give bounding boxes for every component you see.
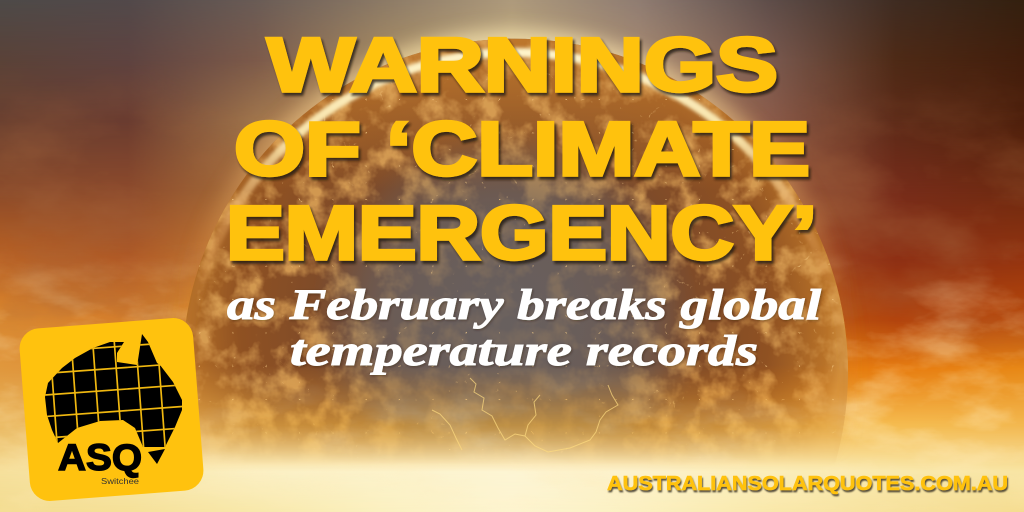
title line 1: WARNINGS [267, 23, 778, 108]
subtitle line 2: temperature records [290, 328, 758, 375]
subtitle line 1: as February breaks global [227, 282, 821, 329]
subtitle [227, 282, 821, 375]
logo wordmark: ASQ [58, 437, 142, 478]
title [226, 23, 817, 276]
glowing cracks [432, 378, 618, 452]
cloud textures [0, 103, 1024, 466]
icon: Tasmania [148, 449, 165, 464]
planet [186, 20, 848, 460]
title line 2: OF ‘CLIMATE [234, 107, 810, 192]
title line 3: EMERGENCY’ [226, 191, 817, 276]
icon: Australia solar panel map [45, 334, 182, 447]
website url: AUSTRALIANSOLARQUOTES.COM.AU [607, 472, 1008, 495]
logo sub-brand: Switchee [101, 477, 140, 486]
logo: ASQ badge [18, 313, 205, 502]
